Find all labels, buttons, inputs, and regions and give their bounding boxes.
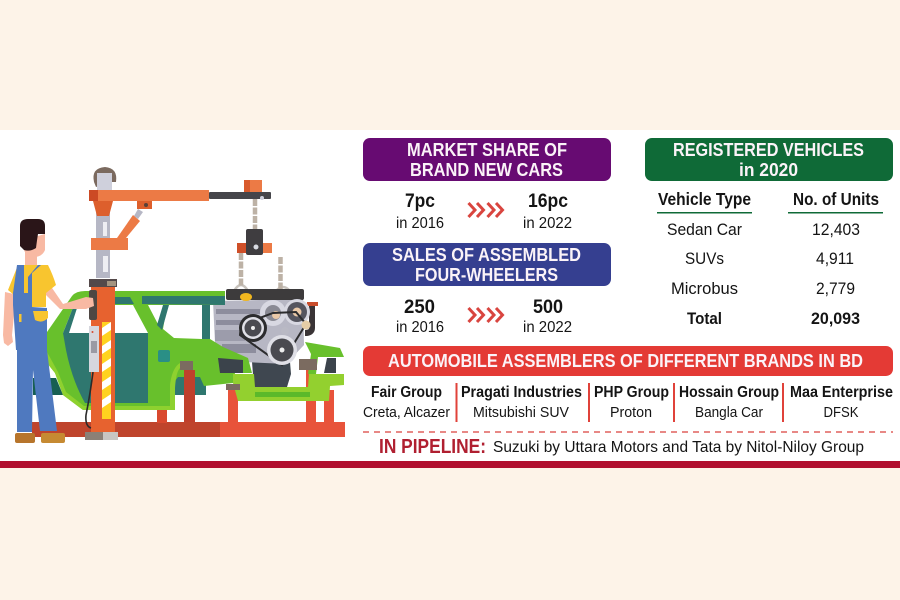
figure 2016 bbox=[396, 297, 444, 336]
table row: total bbox=[687, 309, 860, 328]
heading text: in 2020 bbox=[739, 160, 798, 180]
worker boots bbox=[15, 433, 65, 443]
figure 2022: in 2022 bbox=[523, 215, 572, 232]
crane arm bbox=[89, 180, 271, 216]
windscreen pillar bbox=[157, 305, 210, 339]
assembler: PHP Group: Proton bbox=[610, 404, 652, 421]
table row: SUVs: 4,911 bbox=[816, 249, 854, 268]
arrow chevrons bbox=[468, 308, 502, 322]
engine top cover bbox=[226, 289, 304, 300]
engine bbox=[213, 285, 318, 387]
panel: automobile assemblers bbox=[363, 346, 893, 432]
worker bbox=[3, 219, 94, 443]
worker overalls bbox=[13, 265, 57, 432]
lower door teal bbox=[170, 376, 206, 395]
figure 2016: in 2016 bbox=[396, 215, 444, 232]
assembler: Pragati Industries: Mitsubishi SUV bbox=[473, 404, 569, 421]
figure 2022: in 2022 bbox=[523, 319, 572, 336]
heading bar bbox=[363, 346, 893, 376]
rear window bbox=[63, 305, 115, 333]
door handle bbox=[158, 350, 170, 362]
figure 2022 bbox=[523, 191, 572, 232]
table row: SUVs bbox=[685, 249, 854, 268]
assembler: PHP Group bbox=[594, 384, 669, 421]
table header: No. of Units bbox=[793, 189, 879, 209]
assembler: Fair Group: Creta, Alcazer bbox=[363, 404, 450, 421]
figure 2016: 7pc bbox=[405, 191, 435, 212]
car body shell bbox=[33, 291, 252, 410]
door panel bbox=[63, 333, 148, 403]
table row: sedan: 12,403 bbox=[812, 220, 860, 239]
crane column top bbox=[93, 167, 116, 278]
heading text: REGISTERED VEHICLES bbox=[673, 140, 864, 160]
assembler: PHP Group: PHP Group bbox=[594, 384, 669, 401]
heading text: MARKET SHARE OF bbox=[407, 140, 567, 160]
assembler: Fair Group: Fair Group bbox=[371, 384, 442, 401]
main body bbox=[47, 291, 252, 410]
panel: registered vehicles in 2020 bbox=[645, 138, 893, 328]
front window bbox=[148, 305, 202, 339]
assembler: Pragati Industries bbox=[461, 384, 582, 421]
assembler: Hossain Group bbox=[679, 384, 779, 421]
figure 2022: 16pc bbox=[528, 191, 568, 212]
arrow chevrons bbox=[468, 203, 502, 217]
illustration: car assembly line bbox=[3, 167, 345, 443]
control box bbox=[86, 290, 99, 428]
crane main post bbox=[85, 279, 118, 440]
assembler: Maa Enterprise: Maa Enterprise bbox=[790, 384, 893, 401]
table row: sedan: Sedan Car bbox=[667, 220, 742, 239]
figure 2016: in 2016 bbox=[396, 319, 444, 336]
table row: microbus bbox=[671, 279, 855, 298]
panel: market share of brand new cars bbox=[363, 138, 611, 232]
in pipeline note: Suzuki by Uttara Motors and Tata by Nitol-Niloy Group bbox=[493, 439, 864, 456]
heading bar bbox=[363, 243, 611, 286]
heading text: BRAND NEW CARS bbox=[410, 160, 563, 180]
belts bbox=[240, 312, 306, 365]
heading text: SALES OF ASSEMBLED bbox=[392, 245, 581, 265]
hazard stripe bbox=[102, 322, 111, 419]
bottom crimson band bbox=[0, 461, 900, 468]
table row: total: Total bbox=[687, 309, 722, 328]
table row: microbus: 2,779 bbox=[816, 279, 855, 298]
assembler: Fair Group bbox=[363, 384, 450, 421]
assembler: Hossain Group: Hossain Group bbox=[679, 384, 779, 401]
figure 2022 bbox=[523, 297, 572, 336]
figure 2016 bbox=[396, 191, 444, 232]
table row: total: 20,093 bbox=[811, 309, 860, 328]
floor rail bbox=[32, 422, 345, 437]
panel: sales of assembled four-wheelers bbox=[363, 243, 611, 336]
assembler: Maa Enterprise: DFSK bbox=[824, 404, 858, 421]
roof teal strips bbox=[115, 296, 225, 305]
heading text bbox=[673, 140, 864, 180]
hydraulic brace bbox=[91, 201, 152, 250]
worker head bbox=[20, 219, 45, 267]
rear dark arch bbox=[33, 378, 63, 395]
lifting rings bbox=[234, 285, 290, 291]
pulleys bbox=[260, 300, 286, 326]
lime trim bbox=[47, 352, 180, 410]
car front fender and sill bbox=[180, 342, 344, 422]
assembler: Pragati Industries: Pragati Industries bbox=[461, 384, 582, 401]
rail support posts bbox=[157, 370, 334, 423]
assembler: Hossain Group: Bangla Car bbox=[695, 404, 763, 421]
heading text bbox=[407, 140, 567, 180]
heading bar bbox=[363, 138, 611, 181]
heading text: FOUR-WHEELERS bbox=[415, 265, 558, 285]
figure 2016: 250 bbox=[404, 297, 435, 318]
worker arms bbox=[3, 285, 94, 346]
mid window bbox=[115, 305, 148, 333]
left window strip bbox=[63, 305, 78, 333]
heading text: AUTOMOBILE ASSEMBLERS OF DIFFERENT BRANDS IN BD bbox=[388, 351, 863, 371]
figure 2022: 500 bbox=[533, 297, 563, 318]
worker shirt bbox=[8, 265, 56, 307]
table row: microbus: Microbus bbox=[671, 279, 738, 298]
heading bar bbox=[645, 138, 893, 181]
heading text bbox=[392, 245, 581, 285]
table row: sedan bbox=[667, 220, 860, 239]
crane bbox=[85, 167, 271, 440]
table header: Vehicle Type bbox=[658, 189, 751, 209]
in pipeline note bbox=[379, 436, 864, 458]
table row: SUVs: SUVs bbox=[685, 249, 724, 268]
hanging chains and hook block bbox=[237, 199, 280, 289]
in pipeline note: IN PIPELINE: bbox=[379, 436, 486, 458]
table header bbox=[657, 189, 883, 214]
assembler: Maa Enterprise bbox=[790, 384, 893, 421]
pipes bbox=[305, 304, 312, 333]
